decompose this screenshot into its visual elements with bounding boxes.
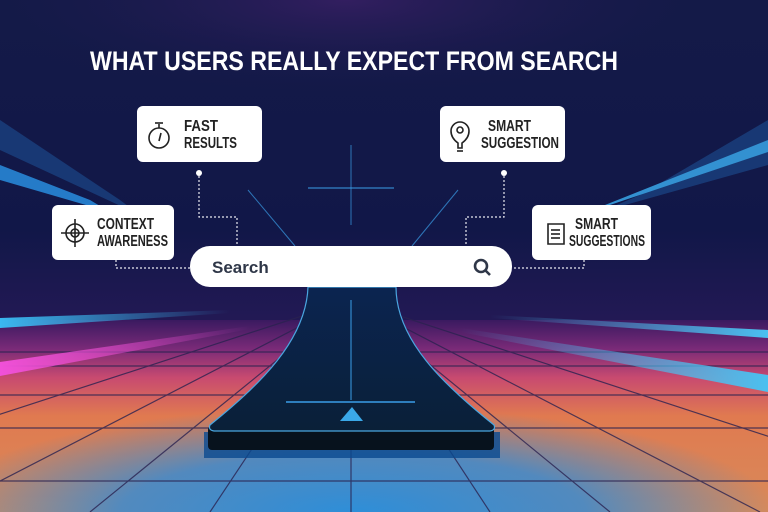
connectors	[116, 172, 584, 268]
upper light streaks	[0, 120, 768, 215]
card: smart suggestion	[440, 106, 565, 162]
icon: stopwatch	[149, 123, 169, 148]
card: smart suggestions: SUGGESTIONS	[569, 233, 645, 250]
card: smart suggestion: SMART	[488, 118, 531, 135]
search bar: Search	[212, 258, 269, 277]
icon: target	[61, 219, 89, 247]
card: smart suggestions: SMART	[575, 216, 618, 233]
road	[204, 287, 500, 458]
card: fast results: RESULTS	[184, 135, 237, 152]
floor grid	[0, 300, 768, 512]
icon: lightbulb	[451, 122, 469, 151]
light streaks	[0, 310, 768, 392]
icon: magnifier	[475, 260, 490, 275]
card: fast results: FAST	[184, 118, 218, 135]
card: context awareness	[52, 205, 174, 260]
card: fast results	[137, 106, 262, 162]
center crosshair	[248, 145, 458, 246]
card: smart suggestion: SUGGESTION	[481, 135, 559, 152]
icon: document	[548, 224, 564, 244]
card: context awareness: CONTEXT	[97, 216, 154, 233]
title: WHAT USERS REALLY EXPECT FROM SEARCH	[90, 46, 618, 76]
card: smart suggestions	[532, 205, 651, 260]
search bar	[190, 246, 512, 287]
card: context awareness: AWARENESS	[97, 233, 168, 250]
